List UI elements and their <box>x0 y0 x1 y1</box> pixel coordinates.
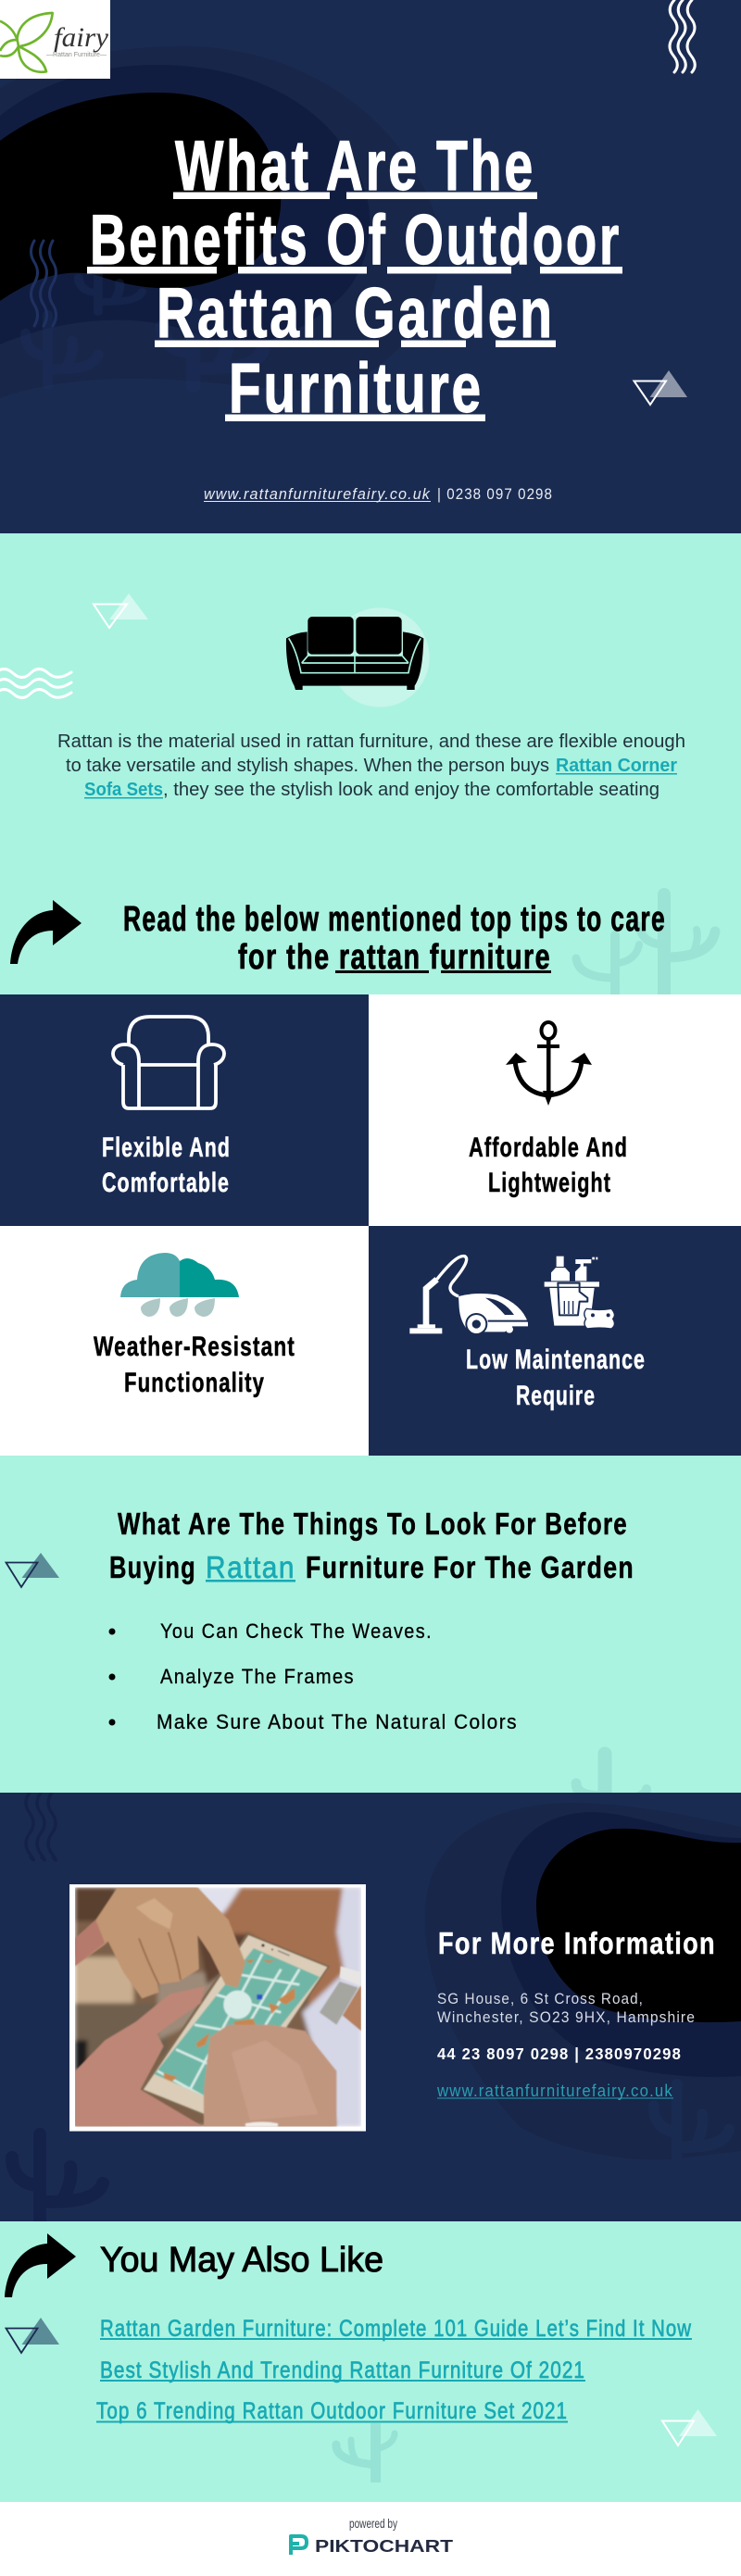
text block: rattan description: Sofa Sets <box>84 780 163 800</box>
checklist: Analyze The Frames <box>160 1665 355 1688</box>
title: What Are The <box>175 127 535 206</box>
cactus decoration <box>336 2423 395 2482</box>
triangle decoration <box>6 1553 59 1587</box>
icon: vacuum and cleaning supplies <box>409 1256 614 1335</box>
website and phone line: www.rattanfurniturefairy.co.uk <box>204 485 431 503</box>
address <box>437 1990 696 2026</box>
icon: armchair <box>113 1017 224 1108</box>
icon: rain cloud <box>120 1253 239 1317</box>
benefit: flexible and comfortable <box>102 1017 231 1198</box>
benefit: affordable and lightweight: Affordable And <box>469 1132 628 1163</box>
related links <box>96 2316 692 2424</box>
benefit: flexible and comfortable: Comfortable <box>102 1168 230 1198</box>
heading: You May Also Like <box>100 2241 383 2280</box>
panel: hero header <box>0 0 741 533</box>
website and phone line <box>204 488 552 502</box>
address: Winchester, SO23 9HX, Hampshire <box>437 2008 696 2026</box>
related links: Best Stylish And Trending Rattan Furniture Of 2021 <box>100 2357 585 2383</box>
checklist: You Can Check The Weaves. <box>160 1619 433 1643</box>
heading: top tips <box>124 905 665 973</box>
benefit: weather-resistant <box>94 1253 295 1398</box>
piktochart logo <box>291 2536 454 2556</box>
logo: fairy rattan furniture: —Rattan Furniture— <box>46 52 107 58</box>
panel: footer <box>0 2502 741 2576</box>
benefit: affordable and lightweight <box>469 1022 628 1198</box>
heading: what to look for: Buying <box>109 1550 196 1584</box>
benefit: flexible and comfortable: Flexible And <box>102 1132 231 1163</box>
phone numbers: 44 23 8097 0298 | 2380970298 <box>437 2045 682 2063</box>
cactus decoration <box>654 2084 729 2164</box>
piktochart logo: PIKTOCHART <box>315 2536 454 2556</box>
website link: www.rattanfurniturefairy.co.uk <box>436 2082 673 2100</box>
triangle decoration <box>662 2409 717 2445</box>
address: SG House, 6 St Cross Road, <box>437 1990 644 2007</box>
benefit: weather-resistant: Functionality <box>124 1368 265 1398</box>
title <box>87 127 622 428</box>
panel: contact information <box>0 1793 741 2221</box>
heading: what to look for <box>109 1507 634 1584</box>
wave decoration <box>26 1793 56 1860</box>
panel: you may also like <box>0 2221 741 2502</box>
benefit: weather-resistant: Weather-Resistant <box>94 1332 295 1362</box>
text block: rattan description: Rattan Corner <box>556 756 677 776</box>
text block: rattan description: , they see the stylish look and enjoy the comfortable seating <box>163 780 659 800</box>
panel: benefits grid <box>0 994 741 1456</box>
white wave decoration <box>670 0 695 72</box>
logo: fairy rattan furniture: fairy <box>54 22 109 53</box>
cactus decoration <box>576 1754 647 1801</box>
cactus decoration <box>576 894 715 1000</box>
benefit: low maintenance: Low Maintenance <box>466 1344 646 1375</box>
checklist: Make Sure About The Natural Colors <box>157 1710 518 1733</box>
logo: fairy rattan furniture <box>0 0 110 79</box>
arrow <box>10 900 82 964</box>
triangle decoration <box>6 2318 59 2353</box>
heading: top tips: for the rattan furniture <box>238 938 551 977</box>
panel: things to look for <box>0 1456 741 1801</box>
checklist <box>109 1619 518 1733</box>
related links: Top 6 Trending Rattan Outdoor Furniture Set 2021 <box>96 2398 568 2424</box>
benefit: low maintenance: Require <box>516 1381 596 1411</box>
icon: anchor <box>506 1022 592 1106</box>
icon: sofa <box>286 607 430 707</box>
text block: rattan description: Rattan is the material used in rattan furniture, and these are flexible enough <box>57 732 685 752</box>
panel: introduction <box>0 533 741 1000</box>
contact background blob <box>425 1803 741 2160</box>
triangle decoration <box>94 594 148 628</box>
arrow <box>5 2233 76 2297</box>
cactus decoration <box>12 2134 103 2220</box>
title: Rattan Garden <box>157 274 555 353</box>
heading: what to look for: Rattan <box>206 1550 295 1584</box>
title: Furniture <box>229 349 484 428</box>
website and phone line: | 0238 097 0298 <box>437 485 553 503</box>
powered by text: powered by <box>349 2517 397 2531</box>
heading: what to look for: Furniture For The Garden <box>306 1550 634 1584</box>
photo: hands with phone map <box>69 1884 366 2132</box>
faint cactus decoration <box>20 265 234 341</box>
triangle decoration <box>634 370 687 405</box>
hero background blob <box>0 46 440 398</box>
text block: rattan description: to take versatile and stylish shapes. When the person buys <box>66 756 549 776</box>
benefit: low maintenance <box>409 1256 646 1411</box>
wave decoration <box>0 669 71 698</box>
dark wave decoration <box>31 241 56 326</box>
text block: rattan description <box>57 732 685 800</box>
benefit: affordable and lightweight: Lightweight <box>488 1168 611 1198</box>
